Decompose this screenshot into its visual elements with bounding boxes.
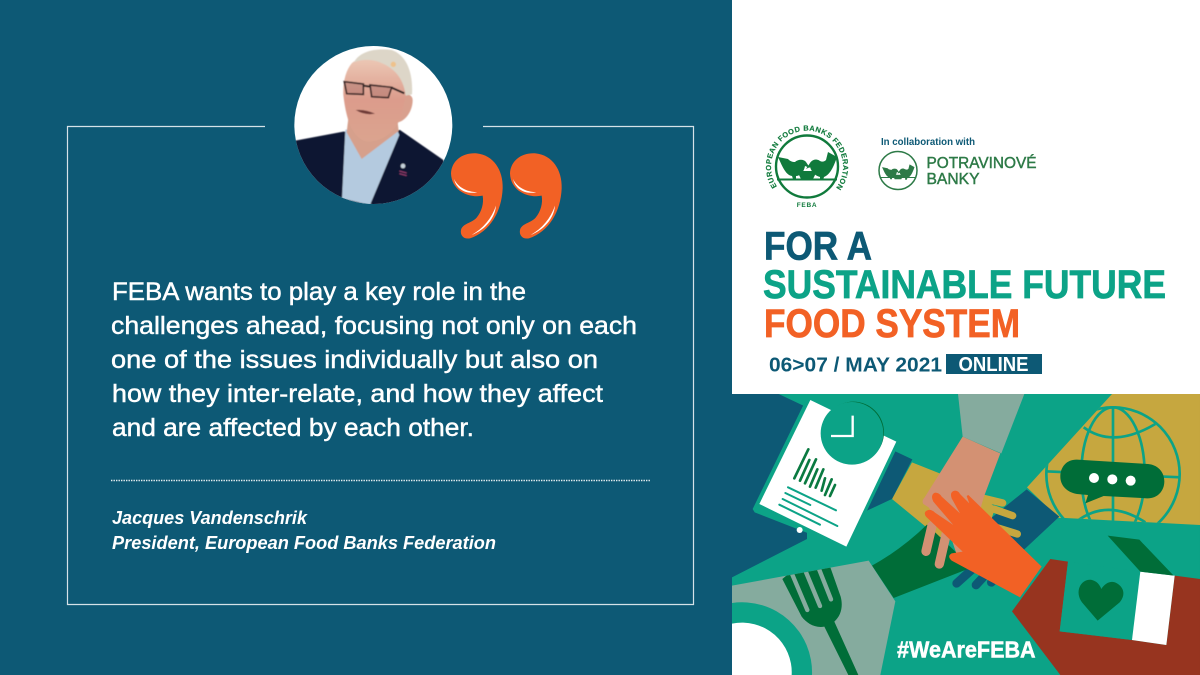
attribution [112, 508, 496, 553]
online badge: ONLINE [958, 354, 1028, 376]
title: FOOD SYSTEM [764, 302, 1020, 346]
dotted divider [111, 480, 651, 482]
quote text: challenges ahead, focusing not only on each [111, 312, 637, 340]
left background panel [0, 0, 732, 675]
hashtag: #WeAreFEBA [897, 636, 1036, 662]
attribution: Jacques Vandenschrik [112, 508, 308, 528]
donation box [1060, 536, 1175, 645]
brown sleeve [1012, 559, 1200, 675]
tablet [753, 400, 896, 548]
date: 06>07 / MAY 2021 [769, 354, 942, 376]
gold arm [892, 462, 1017, 537]
quote text: one of the issues individually but also on [111, 346, 598, 374]
gold corner with globe [1027, 394, 1200, 525]
portrait photo [293, 46, 452, 205]
tan hand [923, 437, 1000, 564]
plate [732, 602, 812, 675]
grey plate mat [732, 561, 895, 675]
quote text: and are affected by each other. [112, 414, 474, 442]
grey sleeve top [958, 394, 1024, 453]
illustration: hands panel [732, 394, 1200, 675]
speech bubble [1060, 460, 1164, 503]
quote text [111, 278, 637, 442]
Potravinove Banky logo: POTRAVINOVÉ [926, 153, 1036, 172]
collaboration label: In collaboration with [881, 137, 975, 148]
dark green arm [872, 525, 972, 598]
navy cuff [867, 451, 912, 511]
title: FOR A [764, 224, 872, 268]
FEBA logo: FEBA [797, 202, 817, 209]
title [763, 224, 1166, 346]
quotation mark [451, 153, 562, 239]
Potravinove Banky logo: BANKY [926, 171, 980, 188]
quote text: FEBA wants to play a key role in the [112, 278, 526, 306]
orange hand [925, 491, 1042, 597]
navy corner shape [732, 394, 807, 577]
right white header panel [732, 0, 1200, 394]
navy arm right [957, 489, 1059, 585]
FEBA logo: EUROPEAN FOOD BANKS FEDERATION [766, 125, 848, 190]
attribution: President, European Food Banks Federation [112, 533, 496, 553]
quote text: how they inter-relate, and how they affect [112, 380, 603, 408]
fork [782, 562, 858, 675]
quote frame [68, 126, 694, 604]
clock [821, 402, 884, 465]
Potravinove Banky logo [879, 152, 1036, 190]
